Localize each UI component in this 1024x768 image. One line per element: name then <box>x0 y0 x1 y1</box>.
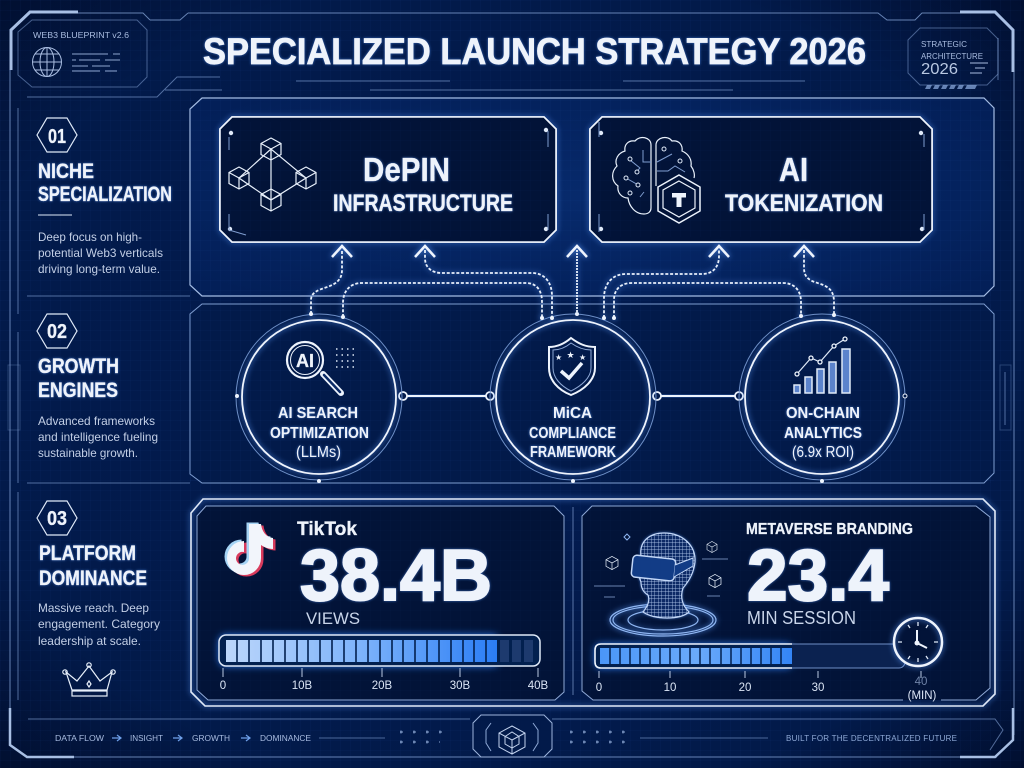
icon: cube network <box>229 138 316 211</box>
title: SPECIALIZED LAUNCH STRATEGY 2026 <box>203 31 866 72</box>
hexagon badge 03 <box>37 501 77 535</box>
icon: globe <box>32 48 62 76</box>
circle: AI search optimization <box>235 314 402 483</box>
circle: MiCA compliance framework <box>490 312 656 483</box>
hexagon badge 03: 03 <box>47 508 67 530</box>
subheading: tokenization: TOKENIZATION <box>725 190 883 217</box>
axis: session minutes: 0 <box>596 682 602 694</box>
axis: views: 0 <box>220 680 226 692</box>
label: AI search optimization <box>270 405 369 461</box>
body: platform dominance <box>38 601 160 648</box>
label: TikTok: TikTok <box>297 519 357 540</box>
card: TikTok views <box>197 506 564 700</box>
axis: views: 10B <box>292 680 313 692</box>
axis: session minutes <box>596 671 937 702</box>
body: platform dominance: leadership at scale. <box>38 634 141 648</box>
label: views: VIEWS <box>306 609 360 628</box>
bar chart: views progress <box>219 635 540 666</box>
label: MiCA compliance framework: FRAMEWORK <box>530 444 616 461</box>
axis: views: 40B <box>528 680 549 692</box>
circle: on-chain analytics <box>739 314 907 483</box>
panel: platform stats outer frame <box>191 499 995 706</box>
hexagon badge 01 <box>37 118 77 152</box>
body: growth engines: sustainable growth. <box>38 446 138 460</box>
label: AI search optimization: AI SEARCH <box>278 405 358 422</box>
panel: niche specialization <box>190 98 994 296</box>
axis: views: 30B <box>450 680 471 692</box>
icon: TikTok logo <box>224 522 276 576</box>
body: niche specialization <box>38 230 163 276</box>
hexagon badge 01: 01 <box>48 126 66 148</box>
body: niche specialization: driving long-term value. <box>38 262 160 276</box>
label: min session: MIN SESSION <box>747 608 856 628</box>
axis: session minutes: 40 <box>915 676 927 688</box>
bar chart: session progress <box>595 644 905 668</box>
body: platform dominance: engagement. Category <box>38 617 160 631</box>
label: MiCA compliance framework <box>529 405 616 461</box>
icon: bar and line chart <box>794 337 850 393</box>
icon: AI magnifier: AI <box>296 351 314 371</box>
icon: VR head <box>594 530 728 636</box>
badge text <box>921 40 983 78</box>
label: AI search optimization: (LLMs) <box>296 444 341 461</box>
heading: growth engines <box>38 355 119 402</box>
body: platform dominance: Massive reach. Deep <box>38 601 149 615</box>
icon: crown <box>63 663 115 696</box>
card: AI tokenization <box>590 117 932 242</box>
card: DePIN infrastructure <box>220 117 556 242</box>
footer: tagline: BUILT FOR THE DECENTRALIZED FUTURE <box>786 734 957 743</box>
value: 23.4: 23.4 <box>747 536 889 616</box>
heading: niche specialization: NICHE <box>38 160 94 183</box>
hexagon badge 02 <box>37 314 77 348</box>
panel: growth engines <box>190 304 994 483</box>
subheading: infrastructure: INFRASTRUCTURE <box>333 190 513 217</box>
value: 38.4B: 38.4B <box>300 536 492 616</box>
body: growth engines: and intelligence fueling <box>38 430 158 444</box>
heading: growth engines: ENGINES <box>38 379 118 402</box>
footer: data flow: DATA FLOW <box>55 734 104 743</box>
body: growth engines: Advanced frameworks <box>38 414 155 428</box>
heading: AI: AI <box>779 151 808 188</box>
icon: clock <box>894 618 942 666</box>
label: MiCA compliance framework: MiCA <box>553 405 592 422</box>
axis: session minutes: 30 <box>812 682 824 694</box>
icon: shield: ★ <box>566 350 575 360</box>
footer: center cube badge <box>473 715 552 757</box>
footer: data flow: GROWTH <box>192 734 230 743</box>
body: growth engines <box>38 414 158 460</box>
footer: data flow: DOMINANCE <box>260 734 311 743</box>
heading: platform dominance: PLATFORM <box>39 542 136 565</box>
badge: strategic architecture <box>908 28 998 89</box>
section 01 text <box>37 118 172 276</box>
arrows: dashed data flows <box>309 246 836 320</box>
icon: shield: ★ <box>555 353 562 362</box>
hexagon badge 02: 02 <box>47 321 67 343</box>
label: on-chain analytics: (6.9x ROI) <box>792 444 854 461</box>
axis: session minutes: (MIN) <box>908 690 937 702</box>
heading: DePIN: DePIN <box>363 151 450 188</box>
label: on-chain analytics: ON-CHAIN <box>786 405 860 422</box>
heading: platform dominance <box>39 542 147 590</box>
axis: session minutes: 10 <box>664 682 676 694</box>
icon: shield: ★ <box>579 353 586 362</box>
label: AI search optimization: OPTIMIZATION <box>270 425 369 442</box>
heading: niche specialization <box>38 160 172 206</box>
section 03 text <box>37 501 160 696</box>
icon: shield <box>549 338 595 395</box>
footer: data flow <box>55 730 625 744</box>
connectors between circles <box>399 392 743 400</box>
heading: niche specialization: SPECIALIZATION <box>38 183 172 206</box>
axis: views: 20B <box>372 680 393 692</box>
heading: platform dominance: DOMINANCE <box>39 567 147 590</box>
card: metaverse branding <box>582 506 990 702</box>
badge text: ARCHITECTURE <box>921 52 983 61</box>
footer: data flow: INSIGHT <box>130 734 163 743</box>
body: niche specialization: Deep focus on high- <box>38 230 142 244</box>
icon: AI magnifier <box>287 342 355 393</box>
axis: session minutes: 20 <box>739 682 751 694</box>
heading: growth engines: GROWTH <box>38 355 119 378</box>
badge text: STRATEGIC <box>921 40 967 49</box>
badge: Web3 blueprint <box>18 20 147 87</box>
label: metaverse branding: METAVERSE BRANDING <box>746 521 913 538</box>
body: niche specialization: potential Web3 verticals <box>38 246 163 260</box>
axis: views <box>220 668 549 692</box>
badge label: WEB3 BLUEPRINT v2.6 <box>33 31 130 40</box>
icon: brain with token <box>613 138 700 223</box>
label: on-chain analytics <box>784 405 862 461</box>
label: on-chain analytics: ANALYTICS <box>784 425 862 442</box>
label: MiCA compliance framework: COMPLIANCE <box>529 425 616 442</box>
section 02 text <box>37 314 158 460</box>
badge text: 2026 <box>921 61 958 78</box>
